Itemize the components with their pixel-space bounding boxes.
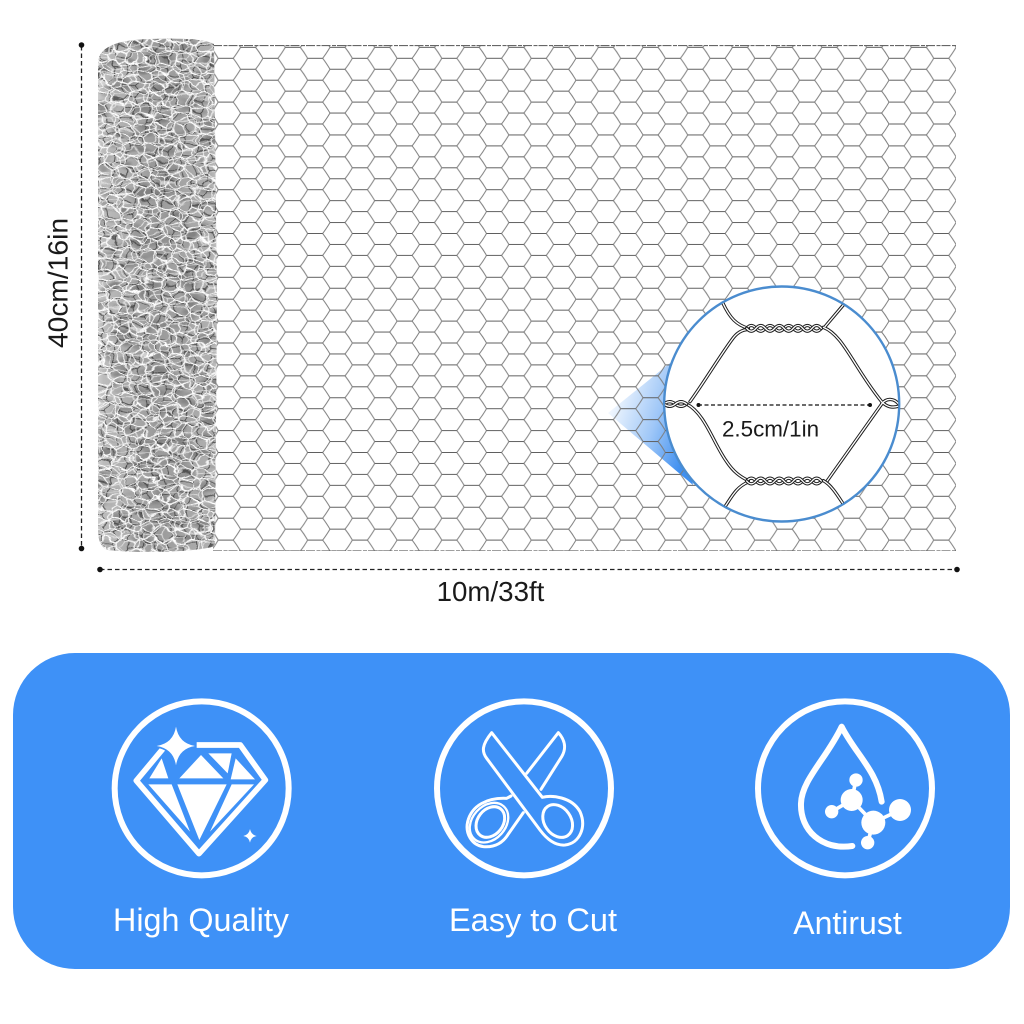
label: antirust: Antirust	[793, 905, 902, 941]
twisted wire joints	[664, 325, 821, 484]
icon: water drop molecule	[758, 701, 932, 875]
width dimension line	[97, 567, 960, 572]
label: easy to cut: Easy to Cut	[449, 902, 617, 938]
rolled wire mesh	[98, 38, 217, 552]
feature: high quality	[113, 701, 290, 938]
magnified mesh callout	[664, 286, 899, 522]
width label: 10m/33ft	[437, 576, 545, 607]
feature: easy to cut	[437, 701, 617, 938]
mesh opening label: 2.5cm/1in	[722, 416, 819, 442]
label: high quality: High Quality	[113, 902, 290, 938]
feature panel	[13, 653, 1010, 969]
mesh opening dimension line	[696, 403, 872, 407]
icon: diamond	[115, 701, 289, 875]
height label: 40cm/16in	[42, 218, 74, 348]
feature: antirust	[758, 701, 932, 941]
height dimension line	[79, 42, 84, 551]
unrolled hexagonal wire mesh	[213, 45, 956, 551]
wire strands	[687, 303, 899, 507]
blue magnifier beam	[608, 363, 693, 485]
icon: scissors	[437, 701, 611, 875]
